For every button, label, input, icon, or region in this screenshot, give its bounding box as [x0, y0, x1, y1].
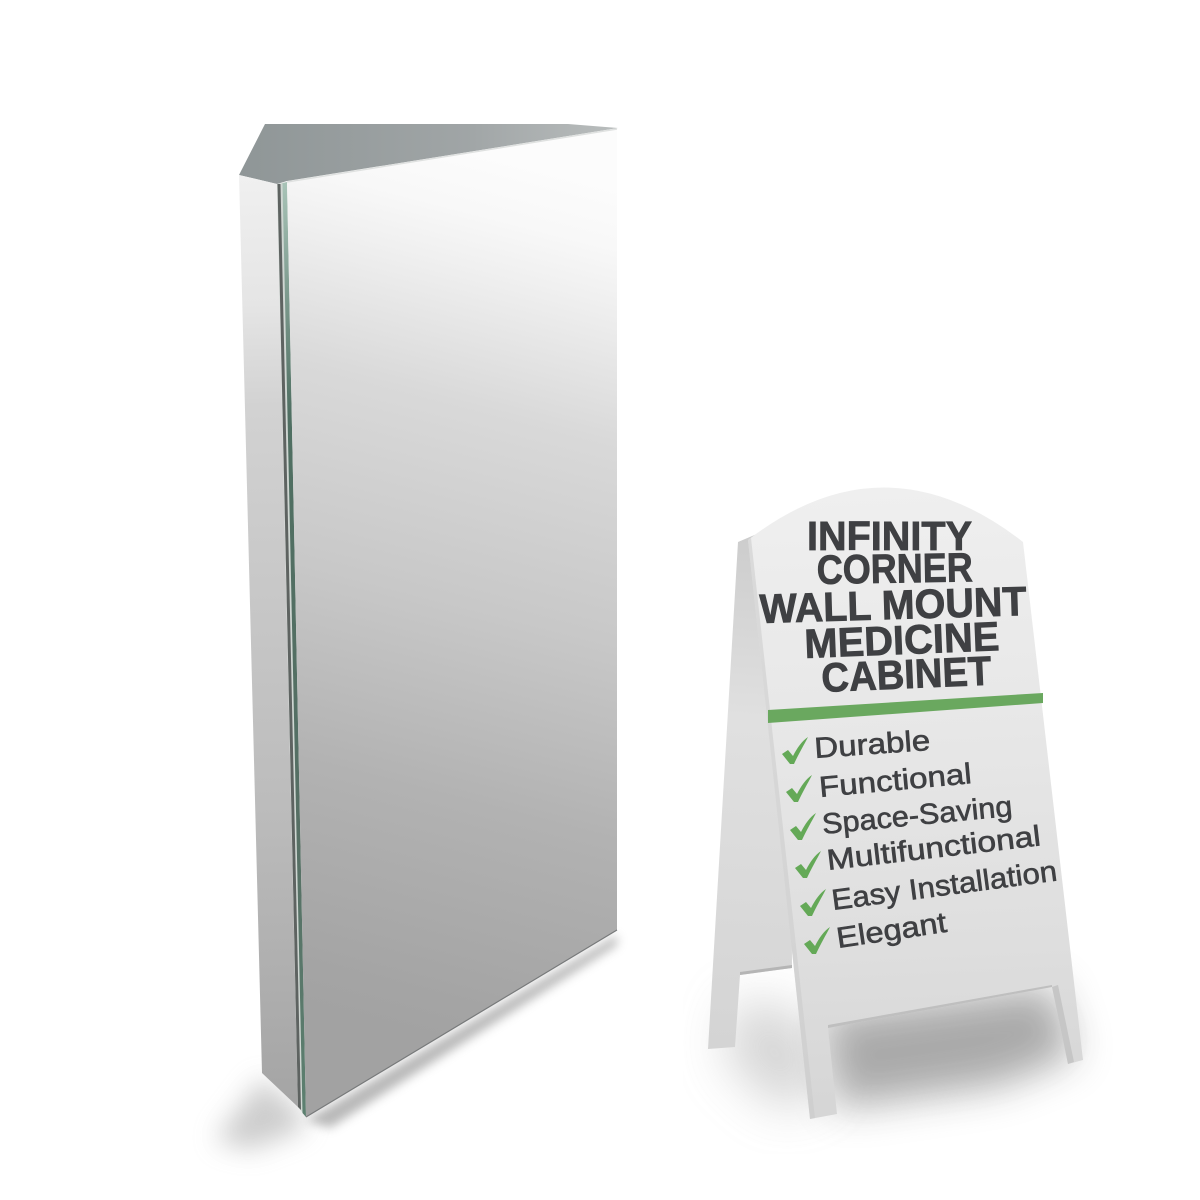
feature list: [782, 725, 1059, 955]
feature: Multifunctional: Multifunctional: [825, 820, 1042, 877]
feature: Easy Installation: Easy Installation: [830, 856, 1059, 917]
feature: Durable: Durable: [813, 725, 931, 765]
sign title: CABINET: [820, 648, 992, 701]
green divider bar: [768, 693, 1043, 723]
medicine cabinet: [239, 124, 618, 1117]
sign edge shading: [740, 538, 1074, 1119]
sign floor shadow: [725, 985, 1075, 1110]
a-frame sign: [708, 487, 1083, 1119]
feature: Elegant: Elegant: [834, 907, 949, 955]
cabinet top face: [239, 124, 618, 184]
cabinet left side panel: [239, 175, 298, 1107]
sign title: INFINITY: [807, 513, 972, 559]
cabinet floor shadow: [215, 935, 617, 1150]
sign title: CORNER: [816, 544, 973, 593]
cabinet hinge and mirror edge: [277, 182, 306, 1117]
feature: Functional: Functional: [818, 758, 973, 804]
sign title: WALL MOUNT: [759, 578, 1027, 632]
sign title: [759, 513, 1027, 701]
sign title: MEDICINE: [804, 613, 1000, 667]
feature: Elegant: [804, 907, 949, 955]
sign front board: [748, 487, 1083, 1119]
feature: Durable: [782, 725, 931, 765]
sign back panel: [708, 520, 792, 1049]
feature: Space-Saving: Space-Saving: [821, 791, 1014, 841]
cabinet mirrored door: [287, 129, 617, 1117]
